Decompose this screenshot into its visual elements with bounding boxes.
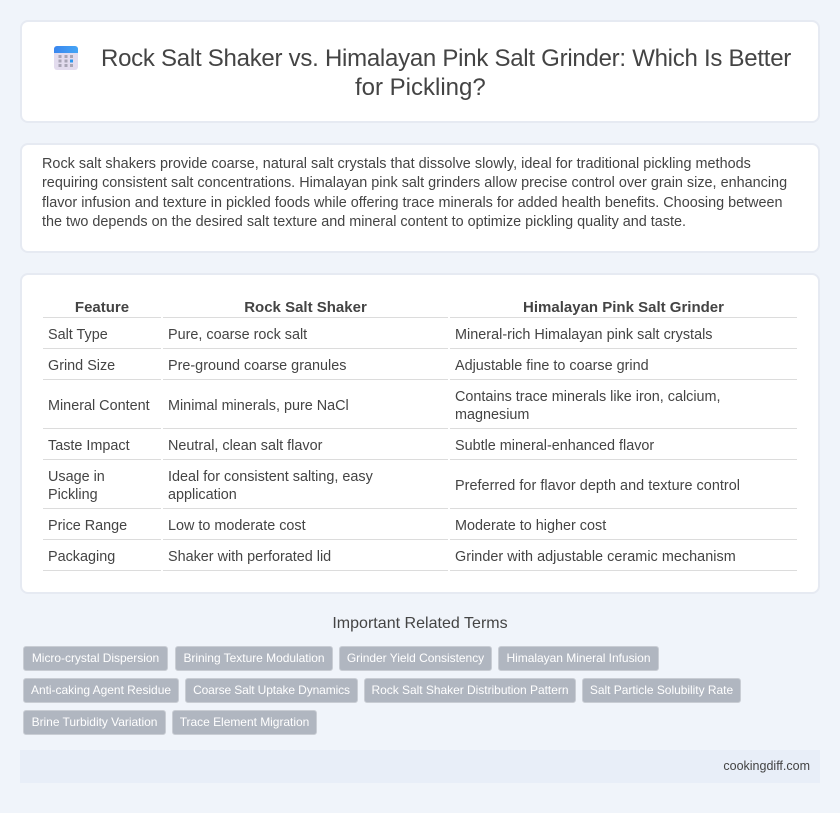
column headers: Himalayan Pink Salt Grinder bbox=[523, 299, 724, 316]
panel: header bbox=[20, 20, 820, 123]
row: packaging bbox=[48, 549, 736, 565]
tag bbox=[364, 678, 576, 703]
row: price range: Price Range bbox=[48, 518, 127, 534]
row: price range: Moderate to higher cost bbox=[455, 518, 606, 534]
tag: Brine Turbidity Variation bbox=[32, 715, 157, 729]
tag bbox=[498, 646, 659, 671]
row: mineral content: Minimal minerals, pure NaCl bbox=[168, 398, 349, 414]
panel: description bbox=[20, 143, 820, 253]
tag: Anti-caking Agent Residue bbox=[31, 683, 171, 697]
row: usage in pickling: Preferred for flavor depth and texture control bbox=[455, 478, 740, 494]
text: description: flavor infusion and texture in pickled foods while offering trace minerals for added health benefits. Choosing between bbox=[42, 195, 782, 211]
tag bbox=[175, 646, 333, 671]
row: grind size: Adjustable fine to coarse grind bbox=[455, 358, 649, 374]
row: grind size bbox=[48, 358, 649, 374]
row: salt type: Pure, coarse rock salt bbox=[168, 327, 307, 343]
row: packaging: Shaker with perforated lid bbox=[168, 549, 331, 565]
text: description: requiring consistent salt concentrations. Himalayan pink salt grinders allow precise control over grain size, enhancing bbox=[42, 175, 787, 191]
tag: Micro-crystal Dispersion bbox=[32, 651, 159, 665]
row: taste impact: Subtle mineral-enhanced flavor bbox=[455, 438, 654, 454]
column headers: Feature bbox=[75, 299, 129, 316]
row: mineral content: Contains trace minerals like iron, calcium, bbox=[455, 389, 721, 405]
text: description: Rock salt shakers provide coarse, natural salt crystals that dissolve slowly, ideal for traditional pickling methods bbox=[42, 156, 751, 172]
row: salt type: Salt Type bbox=[48, 327, 108, 343]
tag: Grinder Yield Consistency bbox=[347, 651, 484, 665]
tag: Coarse Salt Uptake Dynamics bbox=[193, 683, 350, 697]
icon: calendar bbox=[54, 46, 78, 70]
footer text: cookingdiff.com bbox=[723, 759, 810, 773]
tag bbox=[582, 678, 741, 703]
row: packaging: Grinder with adjustable ceramic mechanism bbox=[455, 549, 736, 565]
row: packaging: Packaging bbox=[48, 549, 115, 565]
row: grind size: Grind Size bbox=[48, 358, 115, 374]
tag: Brining Texture Modulation bbox=[183, 651, 325, 665]
tag bbox=[23, 678, 179, 703]
heading: important related terms: Important Related Terms bbox=[332, 615, 508, 632]
row: taste impact: Neutral, clean salt flavor bbox=[168, 438, 322, 454]
row: salt type: Mineral-rich Himalayan pink salt crystals bbox=[455, 327, 713, 343]
row: price range bbox=[48, 518, 606, 534]
row: usage in pickling: Ideal for consistent salting, easy bbox=[168, 469, 373, 485]
tag bbox=[339, 646, 492, 671]
tag: Trace Element Migration bbox=[180, 715, 309, 729]
row: taste impact: Taste Impact bbox=[48, 438, 130, 454]
title bbox=[101, 45, 791, 101]
row: taste impact bbox=[48, 438, 654, 454]
row: grind size: Pre-ground coarse granules bbox=[168, 358, 346, 374]
text: description: the two depends on the desired salt texture and mineral content to optimize pickling quality and taste. bbox=[42, 214, 686, 230]
row: mineral content: magnesium bbox=[455, 407, 529, 423]
row: usage in pickling: Pickling bbox=[48, 487, 98, 503]
footer bbox=[20, 750, 820, 783]
table: comparison bbox=[43, 299, 797, 571]
title: for Pickling? bbox=[355, 74, 486, 101]
title: Rock Salt Shaker vs. Himalayan Pink Salt Grinder: Which Is Better bbox=[101, 45, 791, 72]
tag bbox=[23, 710, 166, 735]
tag: Salt Particle Solubility Rate bbox=[590, 683, 733, 697]
row: price range: Low to moderate cost bbox=[168, 518, 306, 534]
row: salt type bbox=[48, 327, 713, 343]
panel: comparison table bbox=[20, 273, 820, 594]
tags: related terms bbox=[23, 646, 741, 735]
text: description bbox=[42, 156, 787, 230]
row: usage in pickling: Usage in bbox=[48, 469, 105, 485]
tag: Himalayan Mineral Infusion bbox=[507, 651, 650, 665]
tag bbox=[172, 710, 317, 735]
tag bbox=[185, 678, 358, 703]
column headers: Rock Salt Shaker bbox=[244, 299, 367, 316]
row: usage in pickling: application bbox=[168, 487, 237, 503]
row: mineral content: Mineral Content bbox=[48, 398, 150, 414]
row: usage in pickling bbox=[48, 469, 740, 503]
column headers bbox=[75, 299, 724, 316]
row: mineral content bbox=[48, 389, 721, 423]
tag: Rock Salt Shaker Distribution Pattern bbox=[372, 683, 568, 697]
tag bbox=[23, 646, 168, 671]
